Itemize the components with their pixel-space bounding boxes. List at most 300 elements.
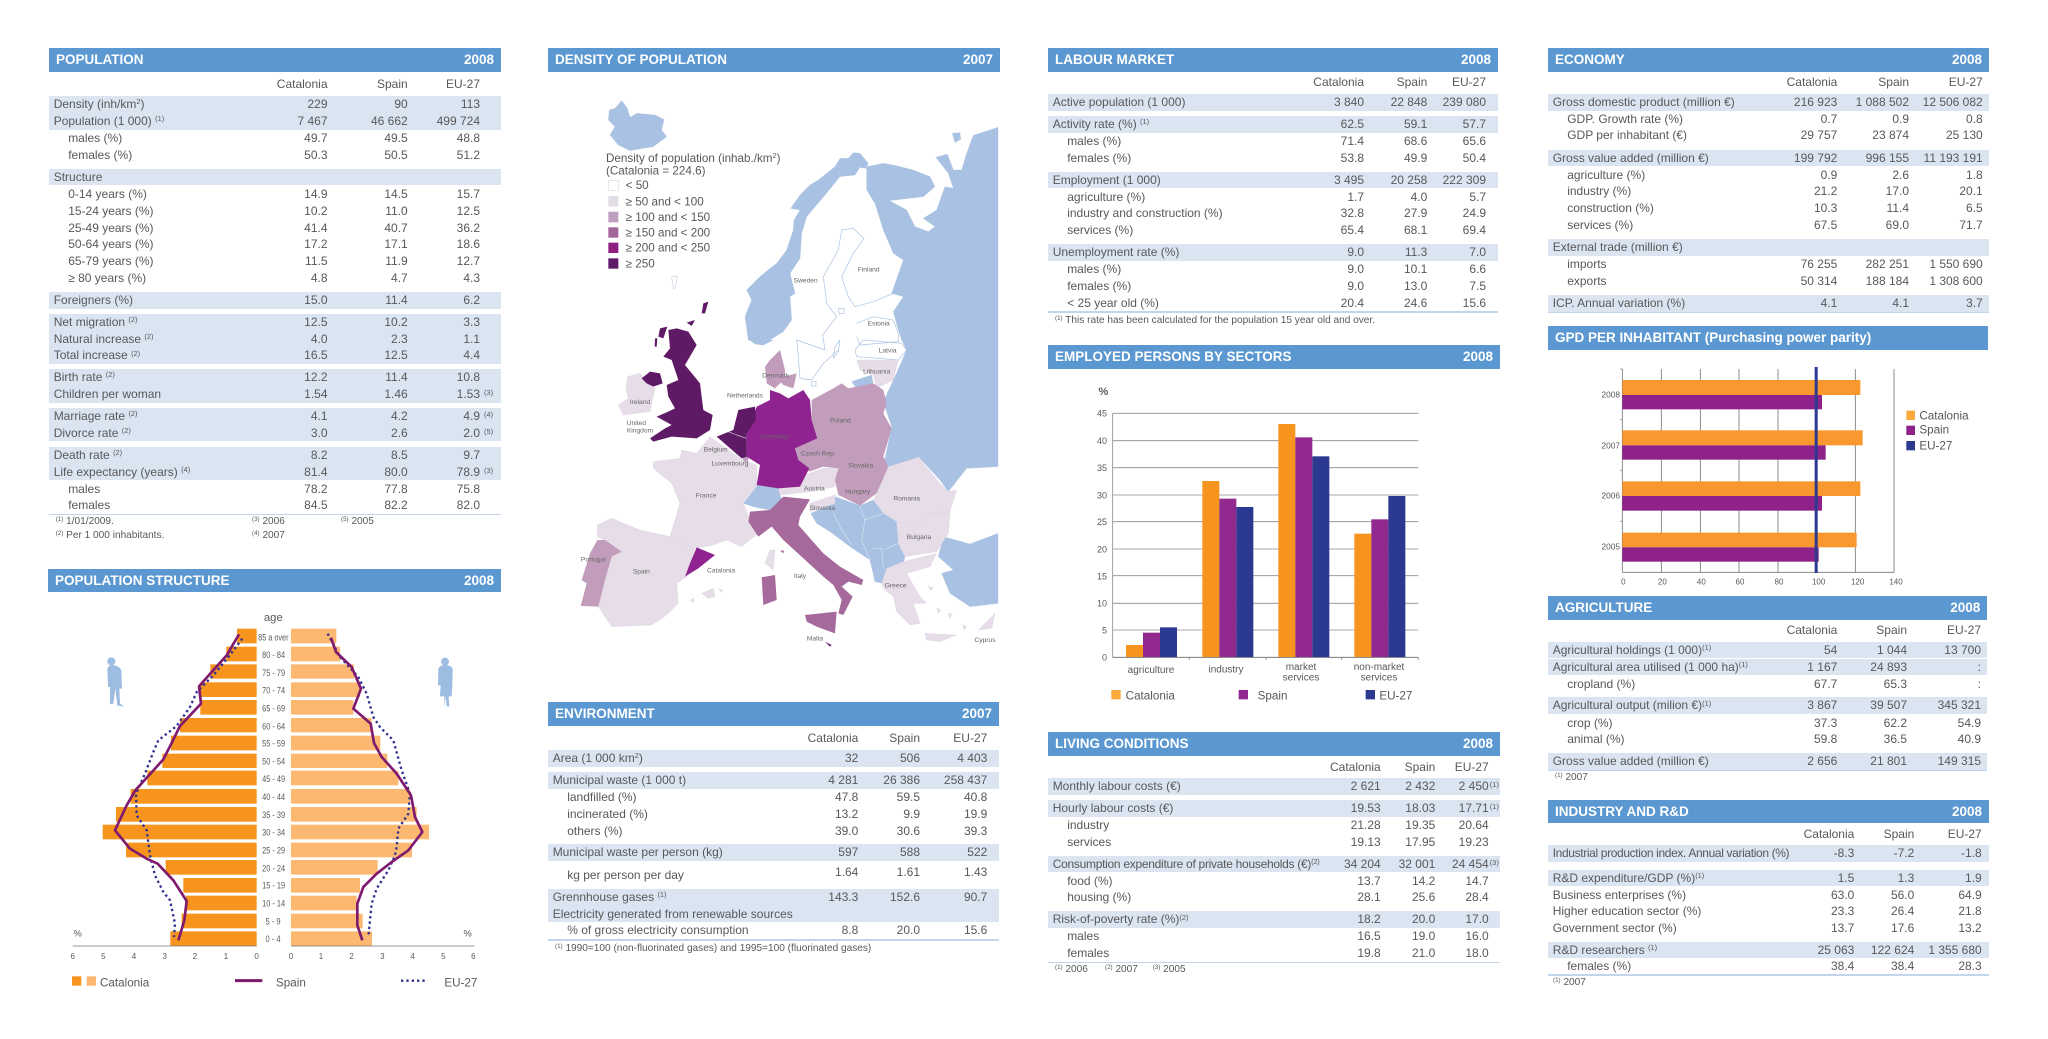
panel: labour market (1048, 48, 1498, 326)
rows: costs by sector: 19.35 (1405, 818, 1435, 832)
map: country labels: Bulgaria (907, 534, 932, 541)
rows: value added by sector: agriculture (%) (1567, 168, 1645, 182)
icon: man (107, 657, 124, 706)
rows: age structure: 0-14 years (%) (68, 187, 147, 201)
rows: marriage and divorce: 2.6 (391, 426, 408, 440)
rows: activity by sex: 50.4 (1463, 151, 1486, 165)
rows: sex: 51.2 (457, 148, 480, 162)
row: active population: 3 840 (1334, 95, 1364, 109)
row: external trade: External trade (million €) (1553, 240, 1683, 254)
rows: density and population (49, 96, 501, 130)
rows: life expectancy by sex: males (68, 482, 100, 496)
rows: waste treatment: landfilled (%) (567, 790, 637, 804)
row: foreigners: 11.4 (385, 293, 408, 307)
row: agricultural area (1548, 659, 1987, 675)
rows: density and population: 7 467 (297, 114, 328, 128)
rows: GDP detail: GDP. Growth rate (%) (1567, 112, 1683, 126)
rows: crop and animal: 62.2 (1884, 716, 1907, 730)
axis labels (70, 928, 476, 961)
legend: Catalonia (1126, 690, 1175, 703)
row: consumption expenditure (1048, 856, 1500, 872)
map: density 50 to 100 countries (597, 360, 995, 642)
rows: food and housing: housing (%) (1067, 890, 1131, 904)
column headers (1787, 75, 1983, 89)
row: employment: Employment (1 000) (1053, 173, 1161, 187)
column headers: Spain (1878, 75, 1909, 89)
rows: age structure: 10.2 (304, 204, 328, 218)
rows: migration and increase: 16.5 (304, 348, 328, 362)
rows: R&D sectors: Higher education sector (%) (1553, 904, 1701, 918)
rows: greenhouse gases and renewable electricity: 90.7 (964, 890, 987, 904)
panel: density of population (548, 48, 1000, 646)
rows: death rate and life expectancy: Death rate (2) (54, 448, 122, 462)
rows: R&D sectors: 64.9 (1958, 888, 1982, 902)
age labels: 75 - 79 (262, 668, 285, 678)
rows: GDP detail: 0.9 (1892, 112, 1909, 126)
row: agricultural output: 345 321 (1938, 698, 1981, 712)
rows: R&D sectors (1548, 887, 1989, 937)
rows: age structure: 15-24 years (%) (68, 204, 154, 218)
map: Europe density (580, 100, 998, 646)
rows: marriage and divorce: 4.1 (311, 409, 328, 423)
rows: unemployment detail: 7.5 (1469, 279, 1486, 293)
rows: age structure (68, 187, 480, 285)
rows: GDP detail: GDP per inhabitant (€) (1567, 128, 1687, 142)
column headers: Spain (377, 77, 408, 91)
map: density 200 to 250, Germany and Catalonia (685, 390, 817, 577)
category labels: industry (1208, 664, 1244, 675)
rows: life expectancy by sex: 84.5 (304, 498, 328, 512)
age labels: 45 - 49 (262, 774, 285, 784)
axis labels: 3 (162, 952, 167, 961)
rows: waste treatment: incinerated (%) (567, 807, 648, 821)
rows: age structure: 4.7 (391, 271, 408, 285)
column headers: EU-27 (1452, 75, 1486, 89)
row: unemployment: 11.3 (1405, 245, 1427, 259)
row: foreigners (49, 292, 501, 308)
rows: density and population: 499 724 (437, 114, 480, 128)
y axis labels: 5 (1102, 625, 1107, 635)
rows: imports and exports: 282 251 (1866, 257, 1909, 271)
row: agricultural holdings: 54 (1824, 643, 1837, 657)
rows: marriage and divorce (49, 408, 501, 441)
bars: industry (1202, 481, 1253, 657)
y axis labels: 0 (1102, 653, 1107, 663)
map: country labels: Cyprus (974, 637, 996, 644)
rows: value added by sector: 21.2 (1814, 184, 1837, 198)
legend: EU-27 (1919, 440, 1952, 453)
axis labels: 6 (471, 952, 476, 961)
chart: employment bars (1097, 386, 1419, 703)
rows: imports and exports: 1 308 600 (1929, 274, 1983, 288)
column headers (277, 77, 480, 91)
rows: greenhouse gases and renewable electricity: 152.6 (890, 890, 920, 904)
map: country labels: Poland (830, 417, 851, 424)
row: employment: 222 309 (1443, 173, 1486, 187)
rows: unemployment detail: 9.0 (1347, 279, 1364, 293)
row: gross value added: 2 656 (1807, 754, 1837, 768)
footnotes: (3) 2005 (1153, 964, 1186, 975)
row: agricultural output: 3 867 (1807, 698, 1837, 712)
rows: migration and increase: 2.3 (391, 332, 408, 346)
age labels: 60 - 64 (262, 721, 285, 731)
rows: death rate and life expectancy: Life expectancy (years) (4) (54, 465, 190, 479)
rows: marriage and divorce: 2.0 (463, 426, 480, 440)
row: agricultural output: 39 507 (1870, 698, 1907, 712)
heading: labour market: LABOUR MARKET (1055, 52, 1174, 67)
row: ICP: ICP. Annual variation (%) (1553, 296, 1685, 310)
row: cropland: 65.3 (1884, 677, 1907, 691)
rows: age structure: 65-79 years (%) (68, 254, 154, 268)
row: R&D expenditure: 1.3 (1898, 871, 1914, 885)
map: country labels: Netherlands (727, 392, 764, 399)
column headers: Catalonia (1804, 827, 1854, 841)
map: country labels: Kingdom (627, 427, 654, 434)
rows: marriage and divorce: Divorce rate (2) (54, 426, 131, 440)
row: gross value added: 199 792 (1794, 151, 1837, 165)
row: consumption expenditure: 24 454 (1452, 857, 1489, 871)
column headers: Spain (1884, 827, 1914, 841)
rows: marriage and divorce: 4.9 (463, 409, 480, 423)
map: country labels: Denmark (762, 373, 790, 380)
heading: labour market: 2008 (1461, 52, 1491, 67)
rows: density and population: 46 662 (371, 114, 408, 128)
rows: costs by sector: 20.64 (1459, 818, 1489, 832)
rows: age structure: 14.9 (304, 187, 328, 201)
row: R&D expenditure: 1.9 (1965, 871, 1982, 885)
footnote: (1) 2007 (1555, 772, 1588, 783)
row: gross electricity: 8.8 (842, 923, 858, 937)
row: foreigners: 6.2 (463, 293, 480, 307)
axis labels: 5 (101, 952, 106, 961)
heading: agriculture: 2008 (1950, 600, 1980, 615)
rows: marriage and divorce: 4.2 (391, 409, 408, 423)
panel: environment (548, 702, 999, 954)
rows: waste treatment (567, 790, 987, 838)
map: country labels: Lithuania (863, 368, 890, 375)
row: GDP (1548, 94, 1989, 111)
rows: migration and increase (49, 314, 501, 364)
y axis labels: 30 (1097, 490, 1107, 500)
row: agricultural output: Agricultural output (milion €)(1) (1553, 698, 1711, 712)
row: industrial production: -7.2 (1894, 846, 1914, 860)
row: GDP: Gross domestic product (million €) (1553, 95, 1735, 109)
row: ICP: 4.1 (1821, 296, 1837, 310)
age labels: 80 - 84 (262, 650, 285, 660)
rows: food and housing: 14.2 (1412, 874, 1435, 888)
row: municipal waste: Municipal waste (1 000 t) (553, 773, 686, 787)
x axis labels: 100 (1812, 578, 1826, 587)
rows: waste treatment: 59.5 (897, 790, 920, 804)
map: country labels: Ireland (630, 399, 650, 406)
row: structure band (49, 169, 501, 185)
map: Sweden, Finland and Baltic outlines (672, 228, 907, 386)
rows: waste treatment: 47.8 (835, 790, 858, 804)
footnotes (1055, 964, 1186, 975)
rows: migration and increase: 4.4 (463, 348, 480, 362)
map: country labels: Austria (804, 486, 825, 493)
row: agricultural holdings (1548, 642, 1987, 658)
rows: unemployment detail: females (%) (1067, 279, 1131, 293)
column headers: Catalonia (1787, 75, 1837, 89)
rows: employment by sector: 24.9 (1463, 206, 1486, 220)
map: country labels: Catalonia (707, 568, 735, 575)
legend: Spain (1919, 424, 1949, 437)
map: legend (606, 151, 781, 271)
rows: life expectancy by sex (68, 482, 480, 512)
age labels: 65 - 69 (262, 703, 285, 713)
rows: waste treatment: others (%) (567, 824, 623, 838)
rows: R&D sectors: 17.6 (1891, 921, 1914, 935)
column headers: Catalonia (1330, 760, 1381, 774)
row: agricultural holdings: 1 044 (1877, 643, 1907, 657)
heading: industry and R&D (1548, 800, 1989, 823)
age labels (258, 612, 288, 944)
row: agricultural holdings: Agricultural holdings (1 000)(1) (1553, 643, 1711, 657)
row: activity rate: 57.7 (1463, 117, 1486, 131)
rows: value added by sector: 17.0 (1886, 184, 1909, 198)
row: gross value added: Gross value added (million €) (1553, 754, 1709, 768)
rows: age structure: 12.5 (457, 204, 480, 218)
heading: population structure (48, 569, 501, 592)
row: foreigners: Foreigners (%) (54, 293, 133, 307)
rows: crop and animal: 36.5 (1884, 732, 1907, 746)
map: country labels: France (696, 492, 717, 499)
rows: costs by sector: services (1067, 835, 1111, 849)
row: active population: Active population (1 000) (1053, 95, 1185, 109)
row: consumption expenditure: Consumption expenditure of private households (€)(2) (1053, 857, 1319, 871)
row: area: 506 (900, 751, 920, 765)
rows: food and housing (1067, 874, 1489, 904)
map: country labels: United (627, 420, 646, 427)
row: agricultural area: 24 893 (1870, 660, 1907, 674)
rows: density and population: 113 (461, 97, 480, 111)
rows: crop and animal: crop (%) (1567, 716, 1613, 730)
row: R&D researchers: 1 355 680 (1928, 943, 1982, 957)
row: industrial production: -1.8 (1961, 846, 1982, 860)
row: municipal waste (548, 772, 999, 789)
heading: population structure: POPULATION STRUCTURE (55, 573, 230, 588)
rows: food and housing: 28.1 (1357, 890, 1381, 904)
row: cropland: : (1978, 677, 1981, 691)
row: gross value added: Gross value added (million €) (1553, 151, 1709, 165)
map: country labels: Germany (761, 433, 789, 440)
line: EU-27 = 100 (1815, 367, 1818, 573)
row: R&D researchers: R&D researchers (1) (1553, 943, 1657, 957)
axis labels: % (464, 928, 472, 938)
rows: food and housing: food (%) (1067, 874, 1113, 888)
y axis labels: 15 (1097, 571, 1107, 581)
row: municipal waste: 4 281 (828, 773, 858, 787)
map: legend: ≥ 250 (626, 258, 655, 271)
axis labels: 6 (70, 952, 75, 961)
map: legend: Density of population (inhab./km (606, 152, 773, 165)
rows: birth rate: 10.8 (457, 370, 480, 384)
row: waste per person (548, 844, 999, 861)
rows: death rate and life expectancy: (3) (484, 466, 493, 475)
heading: industry and R&D: 2008 (1952, 804, 1982, 819)
x axis labels: 140 (1889, 578, 1903, 587)
rows: R&D sectors: Business enterprises (%) (1553, 888, 1686, 902)
row: gross electricity: 20.0 (897, 923, 920, 937)
row: consumption expenditure: 34 204 (1344, 857, 1381, 871)
row: municipal waste: 258 437 (944, 773, 987, 787)
rows: employment by sector: industry and construction (%) (1067, 206, 1223, 220)
row: employment (1048, 172, 1498, 188)
axis labels: 1 (319, 952, 324, 961)
heading: population: POPULATION (56, 52, 144, 67)
rows: sex: 49.5 (384, 131, 408, 145)
rows: death rate and life expectancy: 8.5 (391, 448, 408, 462)
row: monthly labour costs (1048, 778, 1500, 795)
map: legend: ≥ 100 and < 150 (626, 211, 711, 224)
heading: density of population: DENSITY OF POPULATION (555, 52, 727, 67)
rows: death rate and life expectancy (49, 447, 501, 480)
row: females: females (%) (1567, 959, 1631, 973)
rows: activity by sex: 68.6 (1404, 134, 1427, 148)
rows: density and population: Density (inh/km2) (54, 97, 145, 111)
row: GDP: 216 923 (1794, 95, 1837, 109)
category labels (1128, 662, 1405, 683)
age labels: 40 - 44 (262, 792, 285, 802)
row: kg per day: 1.43 (964, 865, 987, 879)
rows: value added by sector: 67.5 (1814, 218, 1837, 232)
rows: greenhouse gases and renewable electricity: Electricity generated from renewable sources (553, 907, 793, 921)
rows: birth rate: 11.4 (385, 370, 408, 384)
age labels: age (264, 612, 283, 624)
axis labels: 5 (441, 952, 446, 961)
rows: unemployment detail: 20.4 (1341, 296, 1364, 310)
rows: migration and increase: 1.1 (463, 332, 480, 346)
row: agricultural output (1548, 697, 1987, 714)
map: country labels: Belgium (704, 447, 728, 454)
rows: food and housing: 13.7 (1357, 874, 1381, 888)
row: females (1548, 958, 1989, 975)
rows: age structure: ≥ 80 years (%) (68, 271, 146, 285)
rows: crop and animal (1548, 715, 1987, 748)
rows: R&D sectors: 56.0 (1891, 888, 1914, 902)
row: waste per person: 588 (900, 845, 920, 859)
rows: GDP detail: 23 874 (1872, 128, 1909, 142)
rows: activity by sex: males (%) (1067, 134, 1121, 148)
map: legend: ≥ 200 and < 250 (626, 242, 711, 255)
rows: age structure: 4.3 (463, 271, 480, 285)
map: legend: ≥ 50 and < 100 (626, 195, 704, 208)
map: legend: ≥ 150 and < 200 (626, 226, 711, 239)
age labels: 15 - 19 (262, 880, 285, 890)
x axis labels: 120 (1851, 578, 1865, 587)
row: activity rate: 62.5 (1341, 117, 1364, 131)
rows: crop and animal: 54.9 (1958, 716, 1981, 730)
row: kg per day: 1.61 (897, 865, 920, 879)
row: gross value added: 21 801 (1870, 754, 1907, 768)
column headers: Catalonia (1787, 623, 1837, 637)
rows: sex: 50.5 (384, 148, 408, 162)
map: country labels: Czech Rep. (801, 451, 836, 458)
row: hourly labour costs: 19.53 (1351, 801, 1381, 815)
age labels: 70 - 74 (262, 685, 285, 695)
map: country labels: Slovenia (810, 505, 835, 512)
legend: Spain (1258, 690, 1287, 703)
rows: value added by sector: 10.3 (1814, 201, 1837, 215)
column headers: Spain (1405, 760, 1435, 774)
bars: Spain (1622, 395, 1826, 562)
rows: unemployment detail (1067, 262, 1486, 310)
row: unemployment: 7.0 (1469, 245, 1486, 259)
heading: industry and R&D: INDUSTRY AND R&D (1555, 804, 1689, 819)
rows: poverty by sex: 16.0 (1465, 929, 1489, 943)
row: gross value added: 11 193 191 (1924, 151, 1983, 165)
rows: death rate and life expectancy: 9.7 (463, 448, 480, 462)
rows: age structure: 14.5 (384, 187, 408, 201)
row: external trade (1548, 239, 1989, 256)
heading: agriculture: AGRICULTURE (1555, 600, 1652, 615)
row: kg per day: 1.64 (835, 865, 858, 879)
rows: migration and increase: 12.5 (384, 348, 408, 362)
footnotes: (2) Per 1 000 inhabitants. (56, 530, 164, 541)
rows: density and population: 90 (394, 97, 408, 111)
panel: population structure (48, 569, 501, 989)
row: risk of poverty: 18.2 (1357, 912, 1381, 926)
lines: Spain (115, 634, 422, 940)
column headers: EU-27 (1455, 760, 1489, 774)
row: R&D researchers: 25 063 (1818, 943, 1854, 957)
column headers: Spain (889, 731, 920, 745)
rows: migration and increase: Net migration (2) (54, 315, 137, 329)
row: active population (1048, 94, 1498, 111)
rows: age structure: 17.2 (304, 237, 328, 251)
rows: life expectancy by sex: females (68, 498, 110, 512)
panel: living conditions (1048, 732, 1500, 975)
row: active population: 239 080 (1443, 95, 1486, 109)
rows: employment by sector: 4.0 (1411, 190, 1427, 204)
rows: employment by sector: agriculture (%) (1067, 190, 1145, 204)
row: monthly labour costs: 2 621 (1351, 779, 1381, 793)
rows: value added by sector: 71.7 (1959, 218, 1983, 232)
rows: marriage and divorce: 3.0 (311, 426, 328, 440)
row: waste per person: 597 (838, 845, 858, 859)
rows: value added by sector: 0.9 (1821, 168, 1837, 182)
map: country labels: Sweden (794, 277, 818, 284)
rows: greenhouse gases and renewable electricity: 143.3 (828, 890, 858, 904)
row: monthly labour costs: Monthly labour costs (€) (1053, 779, 1181, 793)
rows: employment by sector: 68.1 (1404, 223, 1427, 237)
rows: GDP detail (1567, 112, 1983, 142)
footnotes: (5) 2005 (341, 516, 374, 527)
rows: age structure: 25-49 years (%) (68, 221, 154, 235)
heading: density of population: 2007 (963, 52, 993, 67)
map: non-EU blue countries (608, 101, 998, 607)
row: activity rate: Activity rate (%) (1) (1053, 117, 1149, 131)
row: risk of poverty: 17.0 (1465, 912, 1489, 926)
column headers (1313, 75, 1486, 89)
y axis labels: 20 (1097, 544, 1107, 554)
rows: death rate and life expectancy: 8.2 (311, 448, 328, 462)
axis labels: 0 (289, 952, 294, 961)
x axis labels: 60 (1736, 578, 1745, 587)
rows: death rate and life expectancy: 80.0 (384, 465, 408, 479)
map: legend: 2 (773, 151, 777, 160)
row: ICP: 4.1 (1892, 296, 1909, 310)
column headers: EU-27 (446, 77, 480, 91)
row: unemployment (1048, 244, 1498, 261)
row: municipal waste: 26 386 (883, 773, 920, 787)
rows: imports and exports: imports (1567, 257, 1607, 271)
heading: population structure: 2008 (464, 573, 494, 588)
legend (1111, 690, 1412, 703)
rows: food and housing: 28.4 (1465, 890, 1489, 904)
category labels: non-market (1354, 662, 1405, 673)
